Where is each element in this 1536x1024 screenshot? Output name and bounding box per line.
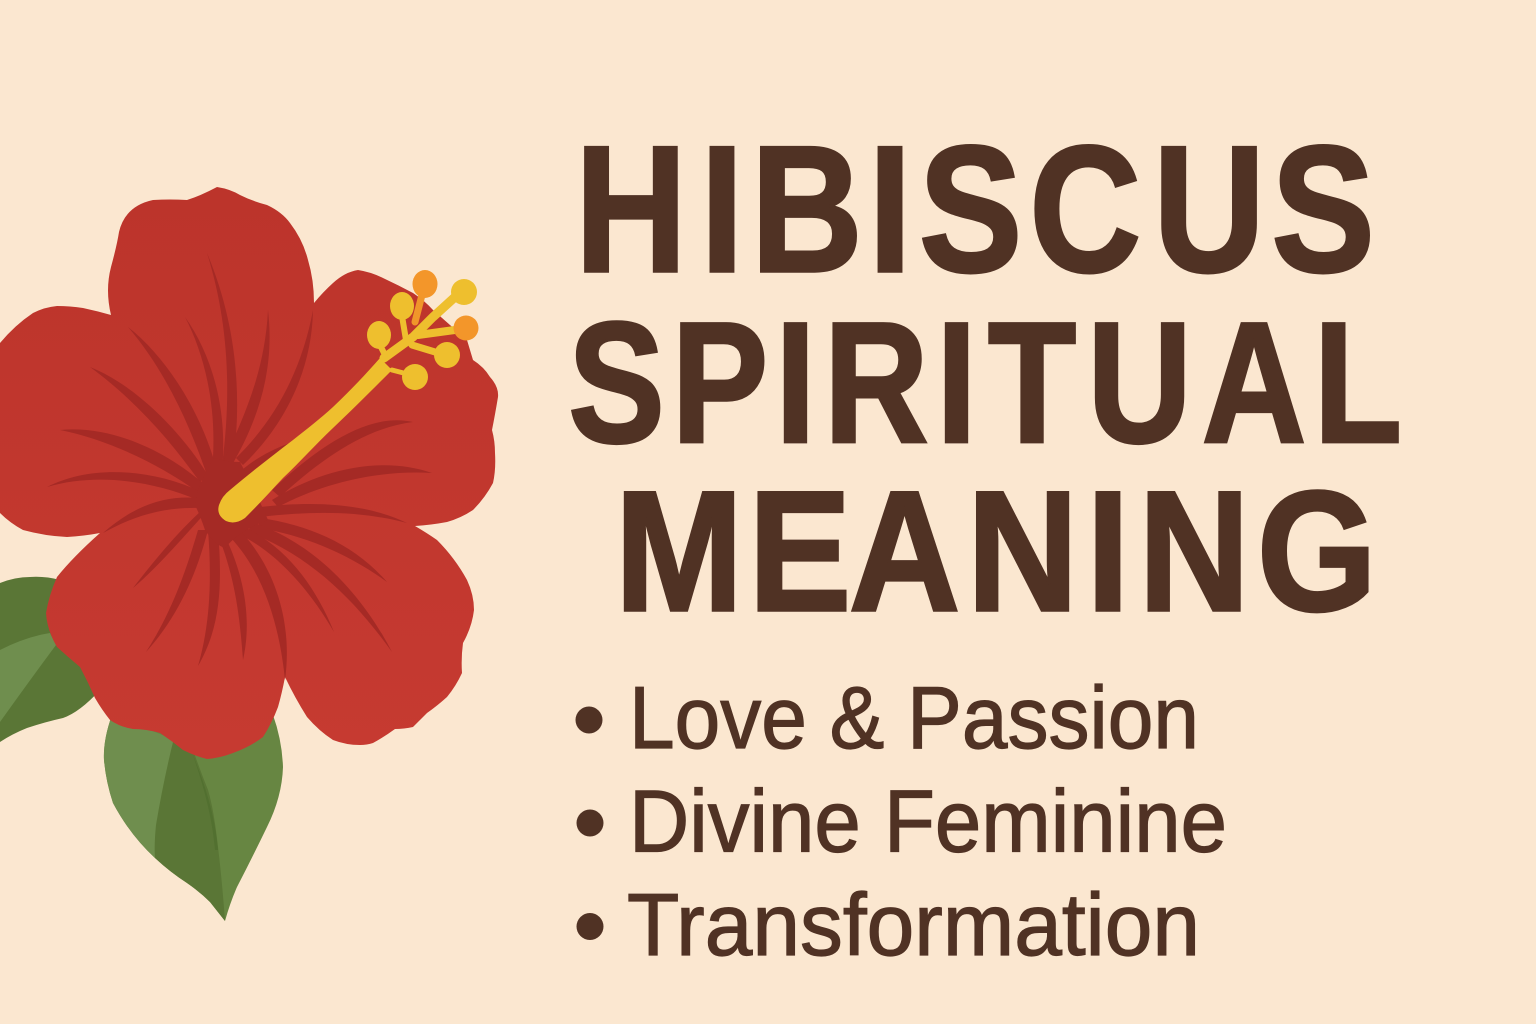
- bullet list: [576, 668, 1227, 974]
- left leaf: [0, 577, 100, 742]
- petals: [0, 187, 498, 759]
- title: [568, 108, 1402, 647]
- icon: hibiscus flower: [0, 187, 498, 921]
- title: SPIRITUAL: [568, 286, 1402, 479]
- stamen: [218, 270, 479, 522]
- bullet: love and passion: Love & Passion: [629, 668, 1199, 767]
- bullet: transformation: Transformation: [627, 875, 1200, 974]
- bottom leaf: [104, 715, 283, 921]
- title: MEANING: [615, 457, 1377, 647]
- petal veins: [47, 253, 432, 680]
- flower centre: [195, 458, 268, 548]
- bullet: divine feminine: Divine Feminine: [629, 772, 1227, 870]
- title: HIBISCUS: [575, 108, 1375, 310]
